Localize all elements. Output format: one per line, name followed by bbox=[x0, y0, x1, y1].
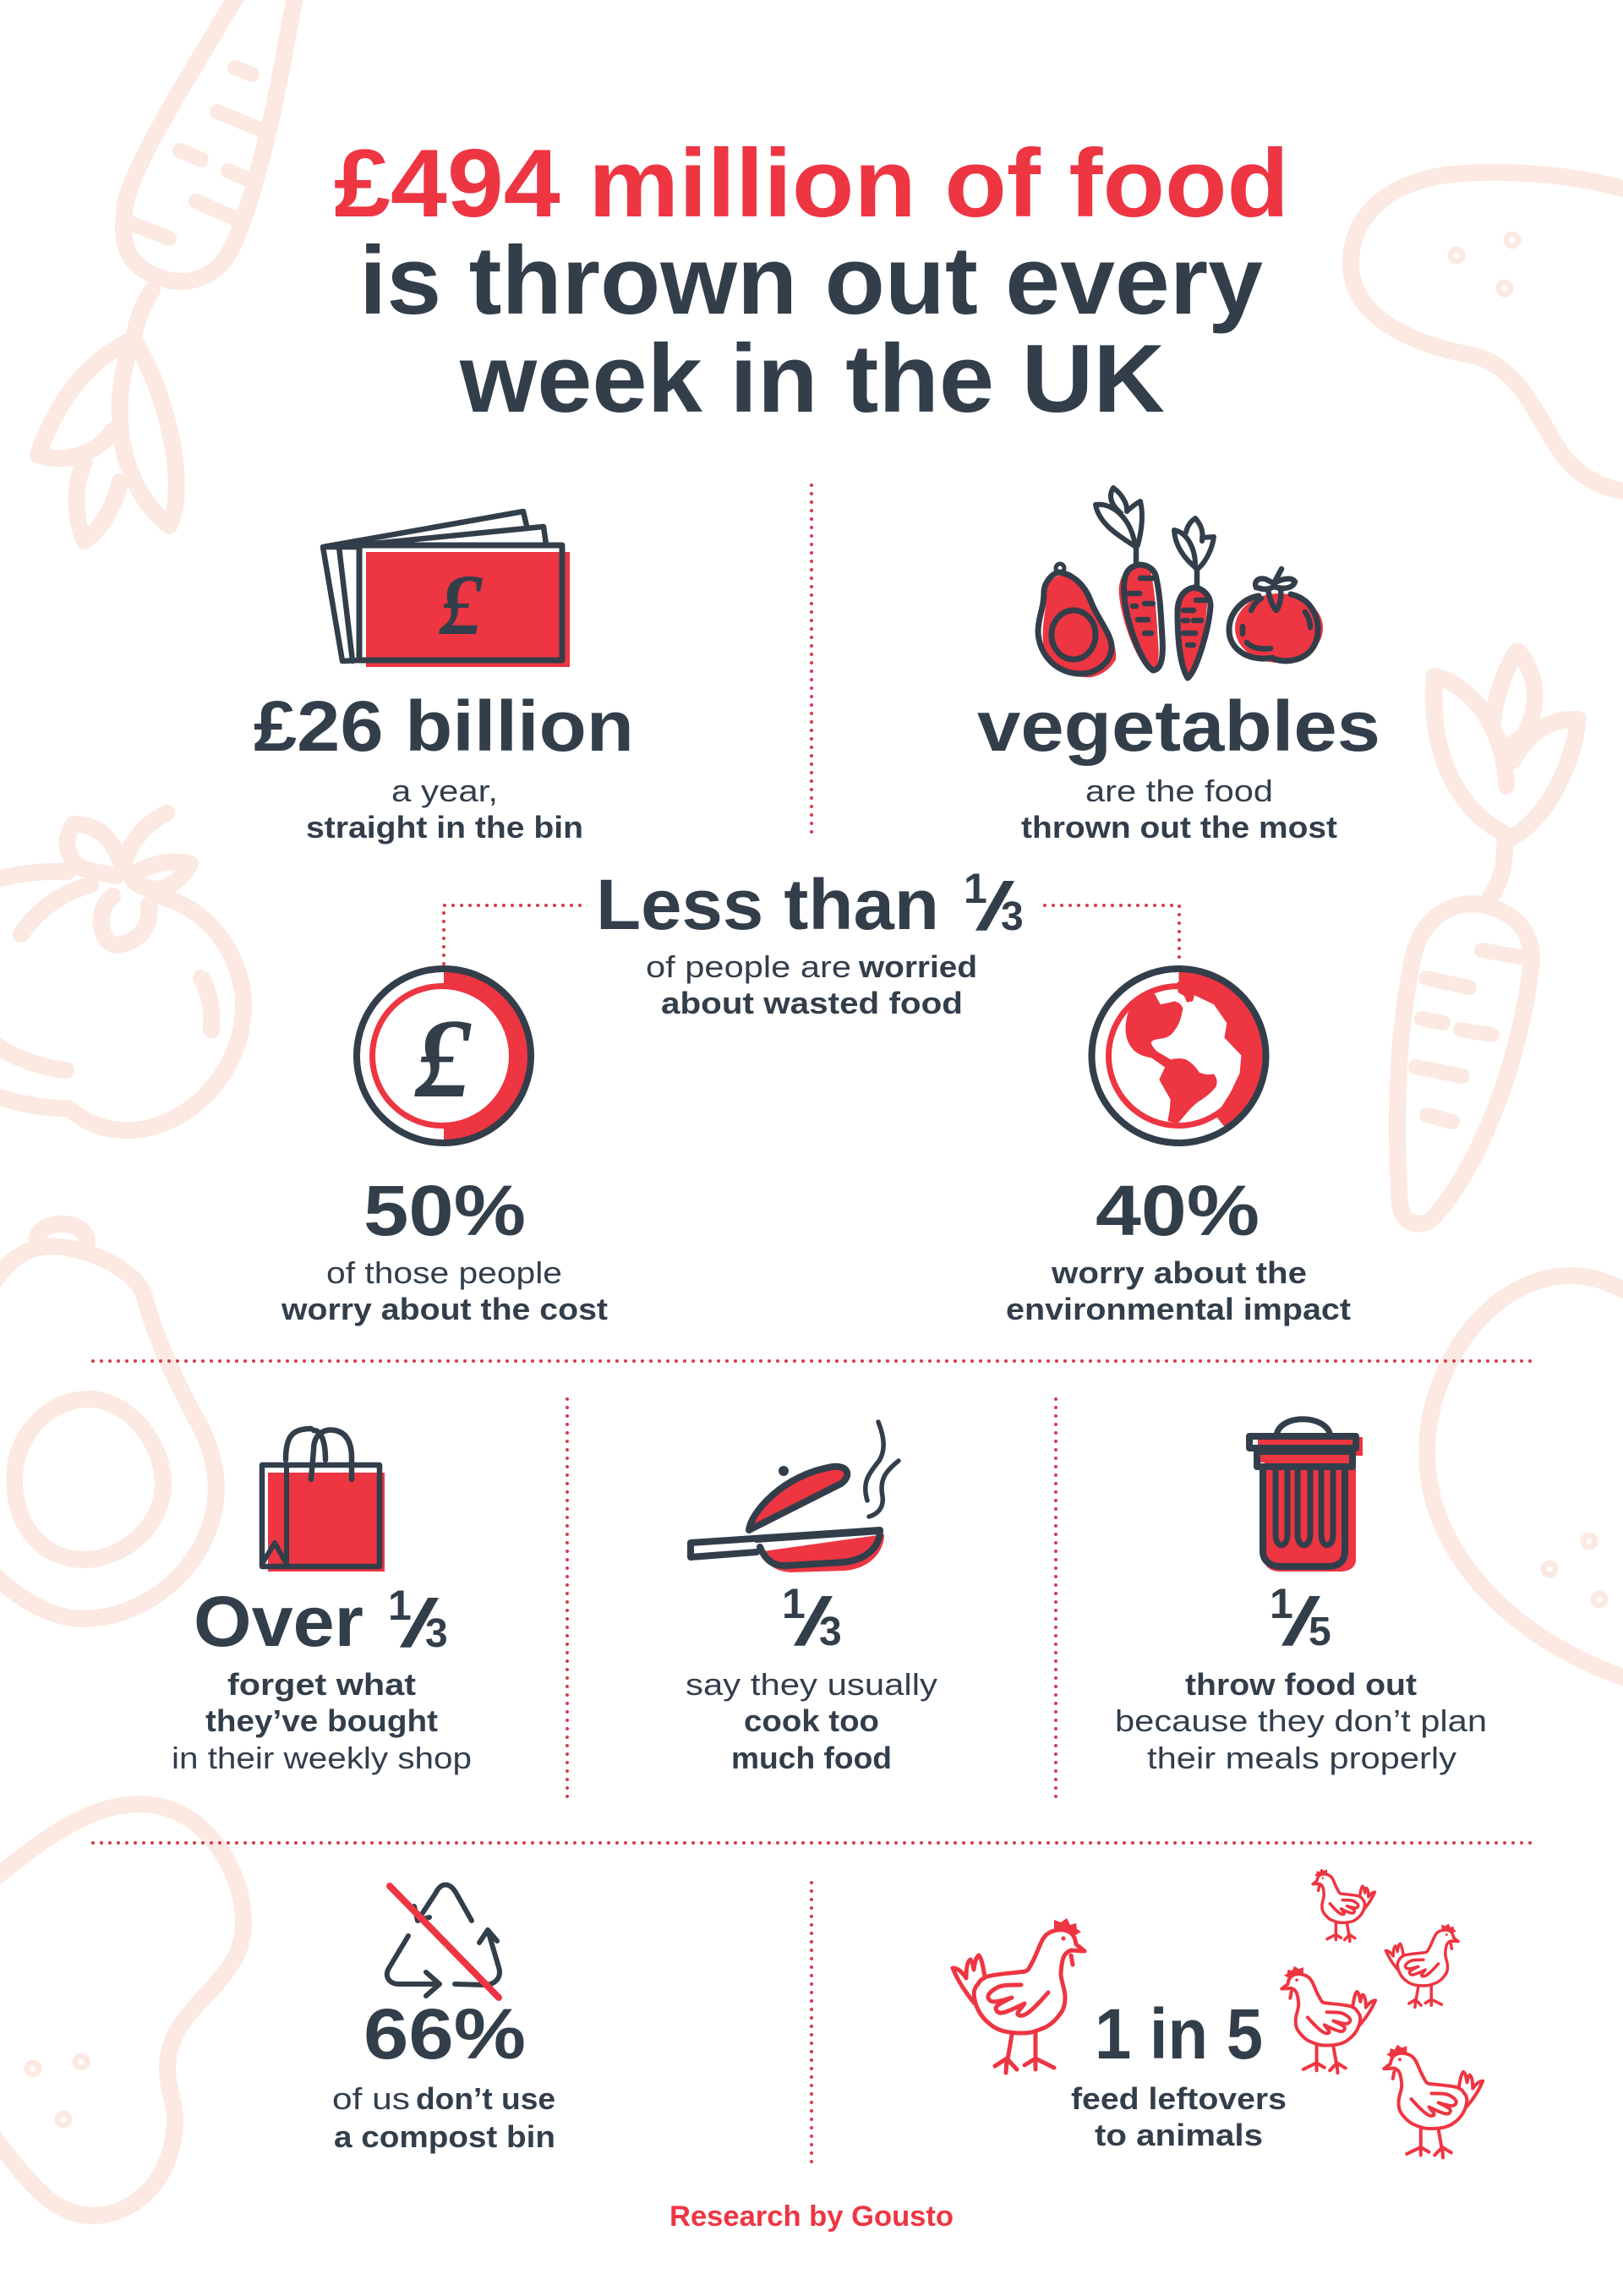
panel: vegetables bbox=[977, 488, 1380, 845]
caption: say they usually cook too much food: say they usually bbox=[686, 1667, 937, 1702]
caption: a year, straight in the bin: straight in the bin bbox=[306, 810, 583, 845]
caption: forget what they've bought in their weekly shop bbox=[172, 1667, 472, 1775]
stat: one third: / bbox=[794, 1584, 834, 1659]
caption: worry about the environmental impact: worry about the bbox=[1051, 1255, 1307, 1290]
caption: feed leftovers to animals: to animals bbox=[1095, 2118, 1263, 2152]
icon: coin half filled: £ bbox=[414, 996, 472, 1121]
stat: 1 in 5: 1 in 5 bbox=[1095, 1994, 1263, 2074]
background icon: carrot top left bbox=[38, 0, 296, 541]
caption: are the food thrown out the most bbox=[1021, 774, 1337, 845]
caption: of people are worried about wasted food: about wasted food bbox=[661, 986, 963, 1020]
caption: forget what they've bought in their weekly shop: they’ve bought bbox=[205, 1703, 438, 1738]
stat: vegetables: vegetables bbox=[977, 686, 1380, 766]
panel: over one third forget bbox=[172, 1429, 472, 1775]
caption: say they usually cook too much food: much food bbox=[731, 1741, 892, 1775]
icon: avocado bbox=[1038, 564, 1116, 677]
caption: of those people worry about the cost: worry about the cost bbox=[281, 1292, 608, 1326]
icon: medium chicken centre bbox=[1281, 1966, 1375, 2073]
stat: one fifth bbox=[1270, 1580, 1331, 1659]
background icon: potato lower left bbox=[0, 1804, 243, 2216]
panel: 50 percent cost bbox=[281, 968, 608, 1326]
background icon: carrot right bbox=[1397, 651, 1578, 1223]
icon: bank notes: £ bbox=[438, 557, 483, 653]
fraction: one third: 1 bbox=[388, 1582, 412, 1629]
panel: 66 percent compost bbox=[332, 1885, 555, 2154]
fraction: one third: / bbox=[975, 869, 1016, 944]
title bbox=[334, 130, 1289, 433]
caption: feed leftovers to animals: feed leftovers bbox=[1071, 2081, 1287, 2116]
caption: forget what they've bought in their weekly shop: in their weekly shop bbox=[172, 1741, 472, 1775]
caption: feed leftovers to animals bbox=[1071, 2081, 1287, 2152]
background icon: potato lower right bbox=[1427, 1276, 1623, 1680]
caption: throw food out because they don't plan their meals properly: their meals properly bbox=[1147, 1741, 1456, 1775]
caption: a year, straight in the bin: a year, bbox=[391, 774, 498, 808]
caption: throw food out because they don't plan their meals properly: because they don’t plan bbox=[1115, 1703, 1487, 1738]
stat: one fifth: 5 bbox=[1309, 1610, 1331, 1654]
background icon: tomato left bbox=[0, 813, 243, 1130]
icon: large carrot bbox=[1096, 488, 1162, 670]
caption: of us don't use a compost bin: a compost bin bbox=[334, 2119, 555, 2154]
icon: bank notes bbox=[323, 511, 570, 667]
caption: forget what they've bought in their weekly shop: forget what bbox=[227, 1667, 416, 1702]
caption: of those people worry about the cost: of those people bbox=[326, 1255, 562, 1290]
icon: shopping bag bbox=[262, 1429, 385, 1572]
stat: over one third bbox=[194, 1582, 448, 1661]
stat: one third bbox=[782, 1580, 842, 1659]
icon: coin half filled bbox=[357, 968, 532, 1144]
caption: of people are worried about wasted food: of people are bbox=[646, 949, 851, 984]
icon: small chicken right bbox=[1385, 1924, 1458, 2007]
icon: tomato bbox=[1229, 569, 1323, 663]
panel: one third cook too much bbox=[686, 1422, 937, 1775]
fraction: one third: 3 bbox=[425, 1611, 448, 1656]
icon: crossed recycling symbol bbox=[387, 1885, 500, 1998]
caption: are the food thrown out the most: are the food bbox=[1085, 774, 1273, 808]
panel: 40 percent environment bbox=[1006, 968, 1351, 1326]
caption: worry about the environmental impact bbox=[1006, 1255, 1351, 1326]
icon: large chicken bbox=[953, 1918, 1085, 2073]
stat: one fifth: / bbox=[1281, 1584, 1322, 1659]
panel: one fifth throw food out bbox=[1115, 1419, 1487, 1775]
fraction: one third: 3 bbox=[1001, 894, 1024, 939]
stat: 40 percent: 40% bbox=[1096, 1171, 1260, 1250]
heading: less than one third: Less than bbox=[596, 865, 939, 944]
icon: frying pan with lid bbox=[691, 1422, 899, 1572]
title: week in the UK bbox=[459, 325, 1165, 433]
caption: are the food thrown out the most: thrown out the most bbox=[1021, 810, 1337, 845]
source credit: Research by Gousto bbox=[669, 2200, 954, 2233]
caption: of those people worry about the cost bbox=[281, 1255, 608, 1326]
panel: less than a third bbox=[596, 865, 1024, 1020]
icon: medium chicken bottom bbox=[1384, 2045, 1483, 2157]
stat: one third: 1 bbox=[782, 1580, 806, 1627]
stat: 66 percent: 66% bbox=[363, 1994, 526, 2074]
caption: of us don't use a compost bin: don’t use bbox=[416, 2081, 555, 2116]
title: £494 million of food bbox=[334, 130, 1289, 238]
icon: globe 40 percent filled bbox=[1092, 968, 1266, 1143]
panel: 1 in 5 feed animals bbox=[953, 1868, 1483, 2157]
caption: a year, straight in the bin bbox=[306, 774, 583, 845]
title: is thrown out every bbox=[359, 227, 1263, 335]
background icon: avocado left bbox=[0, 1224, 216, 1619]
fraction: one third bbox=[388, 1582, 448, 1661]
caption: say they usually cook too much food: cook too bbox=[744, 1703, 879, 1738]
caption: of people are worried about wasted food bbox=[646, 949, 977, 1020]
background icon: potato top right bbox=[1351, 172, 1623, 492]
stat: 50 percent: 50% bbox=[363, 1171, 526, 1250]
icon: small carrot bbox=[1174, 518, 1214, 678]
caption: of us don't use a compost bin: of us bbox=[332, 2081, 410, 2116]
panel: 26 billion bbox=[254, 511, 634, 845]
stat: one fifth: 1 bbox=[1270, 1580, 1293, 1627]
caption: worry about the environmental impact: environmental impact bbox=[1006, 1292, 1351, 1326]
caption: throw food out because they don't plan their meals properly bbox=[1115, 1667, 1487, 1775]
caption: of us don't use a compost bin bbox=[332, 2081, 555, 2154]
caption: say they usually cook too much food bbox=[686, 1667, 937, 1775]
caption: of people are worried about wasted food: worried bbox=[858, 949, 977, 984]
fraction: one third: 1 bbox=[964, 865, 987, 912]
icon: rubbish bin bbox=[1249, 1419, 1363, 1572]
caption: throw food out because they don't plan their meals properly: throw food out bbox=[1185, 1667, 1417, 1702]
icon: small chicken top bbox=[1313, 1868, 1374, 1941]
fraction: one third bbox=[964, 865, 1024, 944]
stat: over one third: Over bbox=[194, 1582, 363, 1661]
stat: one third: 3 bbox=[819, 1610, 842, 1654]
stat: £26 billion: £26 billion bbox=[254, 686, 634, 766]
fraction: one third: / bbox=[400, 1586, 440, 1661]
